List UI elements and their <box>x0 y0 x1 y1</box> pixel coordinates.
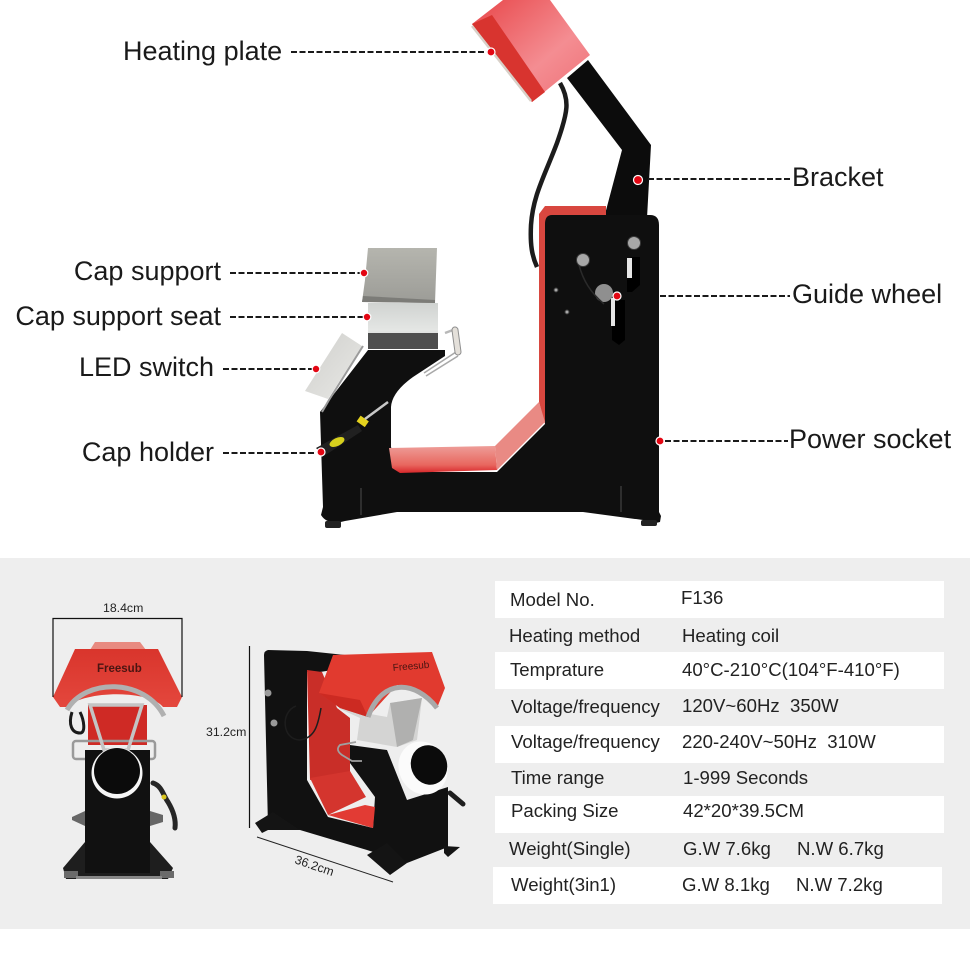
dimension: width <box>53 601 182 697</box>
tool handle <box>450 793 463 804</box>
LED switch <box>305 333 363 412</box>
callout: Heating plate <box>123 36 495 66</box>
row: voltage 120: Voltage/frequency <box>511 696 661 717</box>
row: time range: 1-999 Seconds <box>683 767 808 788</box>
round LED <box>92 748 142 798</box>
side handle <box>153 783 175 828</box>
mounting wings <box>72 811 163 826</box>
rear screws <box>264 690 272 696</box>
row: voltage 120 <box>511 695 839 717</box>
red hood <box>53 649 182 707</box>
gray arch <box>67 687 164 716</box>
dimension: width: 18.4cm <box>103 601 143 615</box>
row: model: Model No. <box>510 589 595 610</box>
guide wheel <box>579 265 613 304</box>
row: weight 3in1: G.W 8.1kg <box>682 874 770 895</box>
row: packing size: Packing Size <box>511 800 618 821</box>
row: model <box>510 587 723 610</box>
base plates <box>255 812 407 875</box>
cap support seat <box>368 303 438 349</box>
row: heating method: Heating method <box>509 625 640 646</box>
aluminum seat <box>338 698 422 747</box>
callout: Cap holder: Cap holder <box>82 437 214 467</box>
row: time range: Time range <box>511 767 604 788</box>
base <box>63 842 173 879</box>
row: time range <box>511 767 808 788</box>
red back <box>88 705 147 745</box>
row: voltage 220: Voltage/frequency <box>511 731 661 752</box>
LED disc <box>390 733 456 803</box>
red panel <box>307 670 350 780</box>
cap support <box>362 248 437 303</box>
body <box>85 750 150 873</box>
cord <box>285 706 321 740</box>
handle <box>338 742 362 761</box>
angled view machine <box>255 650 463 875</box>
row: voltage 220: 220-240V~50Hz 310W <box>682 731 876 752</box>
dimension: depth <box>257 837 393 882</box>
brand text: Freesub <box>392 660 430 674</box>
callout: Bracket: Bracket <box>792 162 884 192</box>
callout: Guide wheel: Guide wheel <box>792 279 942 309</box>
callout: Cap support seat <box>15 301 371 331</box>
loose cord <box>70 712 84 733</box>
row: weight 3in1: N.W 7.2kg <box>796 874 883 895</box>
row: heating method <box>509 625 779 646</box>
black housing <box>264 650 448 863</box>
callout: Power socket: Power socket <box>789 424 952 454</box>
row: temperature: Temprature <box>510 659 604 680</box>
heating plate <box>472 0 590 102</box>
machine photo: side view <box>305 0 661 528</box>
row: packing size <box>511 800 804 821</box>
row: temperature: 40°C-210°C(104°F-410°F) <box>682 659 900 680</box>
callout: Cap holder <box>82 437 325 467</box>
brand text: Freesub <box>97 663 142 675</box>
dimension: height: 31.2cm <box>206 725 246 739</box>
V bracket <box>90 705 142 750</box>
callout: Cap support: Cap support <box>74 256 221 286</box>
carry handle <box>73 741 155 759</box>
main black body <box>320 215 661 523</box>
red inner strip <box>539 206 606 424</box>
row: model: F136 <box>681 587 723 608</box>
specification table <box>493 581 944 904</box>
callout: Bracket <box>634 162 884 192</box>
callout: Heating plate: Heating plate <box>123 36 282 66</box>
row: weight single <box>509 838 884 859</box>
row: weight single: Weight(Single) <box>509 838 631 859</box>
callout: Cap support seat: Cap support seat <box>15 301 221 331</box>
cable <box>531 83 566 267</box>
row: heating method: Heating coil <box>682 625 779 646</box>
top strip <box>90 642 146 650</box>
red hood <box>319 652 445 717</box>
row: voltage 120: 120V~60Hz 350W <box>682 695 839 716</box>
callout: Power socket <box>656 424 952 454</box>
row: weight single: G.W 7.6kg <box>683 838 771 859</box>
screws <box>554 236 640 314</box>
callout: LED switch <box>79 352 320 382</box>
dimension: depth: 36.2cm <box>293 853 336 879</box>
red diagonal <box>495 402 545 470</box>
row: weight single: N.W 6.7kg <box>797 838 884 859</box>
panel: specifications background <box>0 558 970 929</box>
feet <box>325 520 657 528</box>
guide slots <box>611 257 640 345</box>
row stripes <box>493 581 944 904</box>
row: weight 3in1: Weight(3in1) <box>511 874 616 895</box>
cap holder <box>316 402 388 456</box>
gray arch <box>368 687 437 717</box>
row: weight 3in1 <box>511 874 883 895</box>
row: temperature <box>510 659 900 680</box>
side handle <box>424 330 458 376</box>
row: voltage 220 <box>511 731 876 752</box>
base pins <box>361 486 621 515</box>
red floor <box>389 446 497 473</box>
bracket arm <box>567 60 651 218</box>
row: packing size: 42*20*39.5CM <box>683 800 804 821</box>
red floor <box>310 771 366 815</box>
front view machine <box>53 642 182 879</box>
callout: LED switch: LED switch <box>79 352 214 382</box>
callout: Cap support <box>74 256 368 286</box>
callout: Guide wheel <box>613 279 942 309</box>
